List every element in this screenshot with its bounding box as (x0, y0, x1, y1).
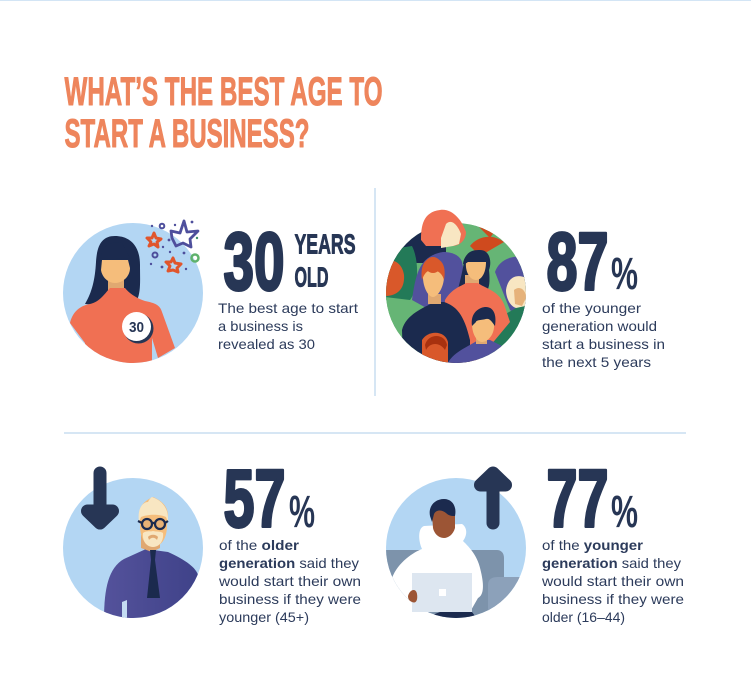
text: younger generation description (541, 537, 684, 625)
stat: 87%: 87 (546, 216, 608, 308)
title: WHAT’S THE BEST AGE TO (64, 70, 382, 114)
text: older generation description: business if they were (219, 591, 361, 607)
text: older generation description: would start their own (218, 573, 361, 589)
text: younger generation description: business if they were (542, 591, 684, 607)
stat: 57%: % (289, 486, 315, 537)
icon: stars and confetti (147, 221, 198, 272)
text: older generation description: generation said they (219, 555, 359, 571)
icon: glasses (138, 519, 168, 529)
text: best age description: The best age to start (218, 300, 358, 316)
text: best age description (218, 300, 358, 352)
arrow: down (88, 473, 112, 523)
icon: red-haired woman head (421, 210, 466, 248)
stat: 30 years old: YEARS (294, 228, 356, 260)
text: younger generation description: of the younger (542, 537, 644, 553)
text: older generation description (218, 537, 361, 625)
icon: older man (63, 473, 203, 620)
text: younger generation description (542, 300, 665, 370)
stat: 30 years old: 30 (224, 216, 284, 308)
stat: 57%: 57 (224, 454, 286, 544)
text: younger generation description: generation would (542, 318, 657, 334)
icon: laptop (412, 573, 472, 612)
panel: 77 percent (386, 454, 684, 625)
text: best age description: revealed as 30 (218, 336, 315, 352)
text: best age description: a business is (218, 318, 303, 334)
title (64, 70, 382, 156)
text: younger generation description: of the younger (542, 300, 641, 316)
arrow: up (480, 473, 506, 523)
stat: 77%: 77 (546, 454, 608, 544)
text: older generation description: of the older (219, 537, 300, 553)
text: younger generation description: would start their own (541, 573, 684, 589)
text: older generation description: younger (45+) (219, 609, 309, 625)
stat: 77%: % (611, 486, 638, 537)
icon: young person with laptop (386, 473, 530, 620)
text: younger generation description: generation said they (542, 555, 681, 571)
title: START A BUSINESS? (64, 112, 310, 156)
text: younger generation description: start a business in (542, 336, 665, 352)
stat: 30 years old (224, 216, 356, 308)
text: younger generation description: the next 5 years (542, 354, 651, 370)
stat: 87%: % (611, 248, 638, 299)
panel: 87 percent (385, 210, 665, 370)
text: younger generation description: older (16–44) (542, 609, 625, 625)
stat: 30 years old: OLD (294, 262, 328, 292)
panel: 57 percent (63, 454, 361, 625)
icon: woman with 30 badge: 30 (129, 319, 144, 336)
panel: 30 years old (63, 216, 358, 366)
icon: crowd of young people (385, 210, 530, 370)
icon: woman with 30 badge (63, 221, 203, 366)
